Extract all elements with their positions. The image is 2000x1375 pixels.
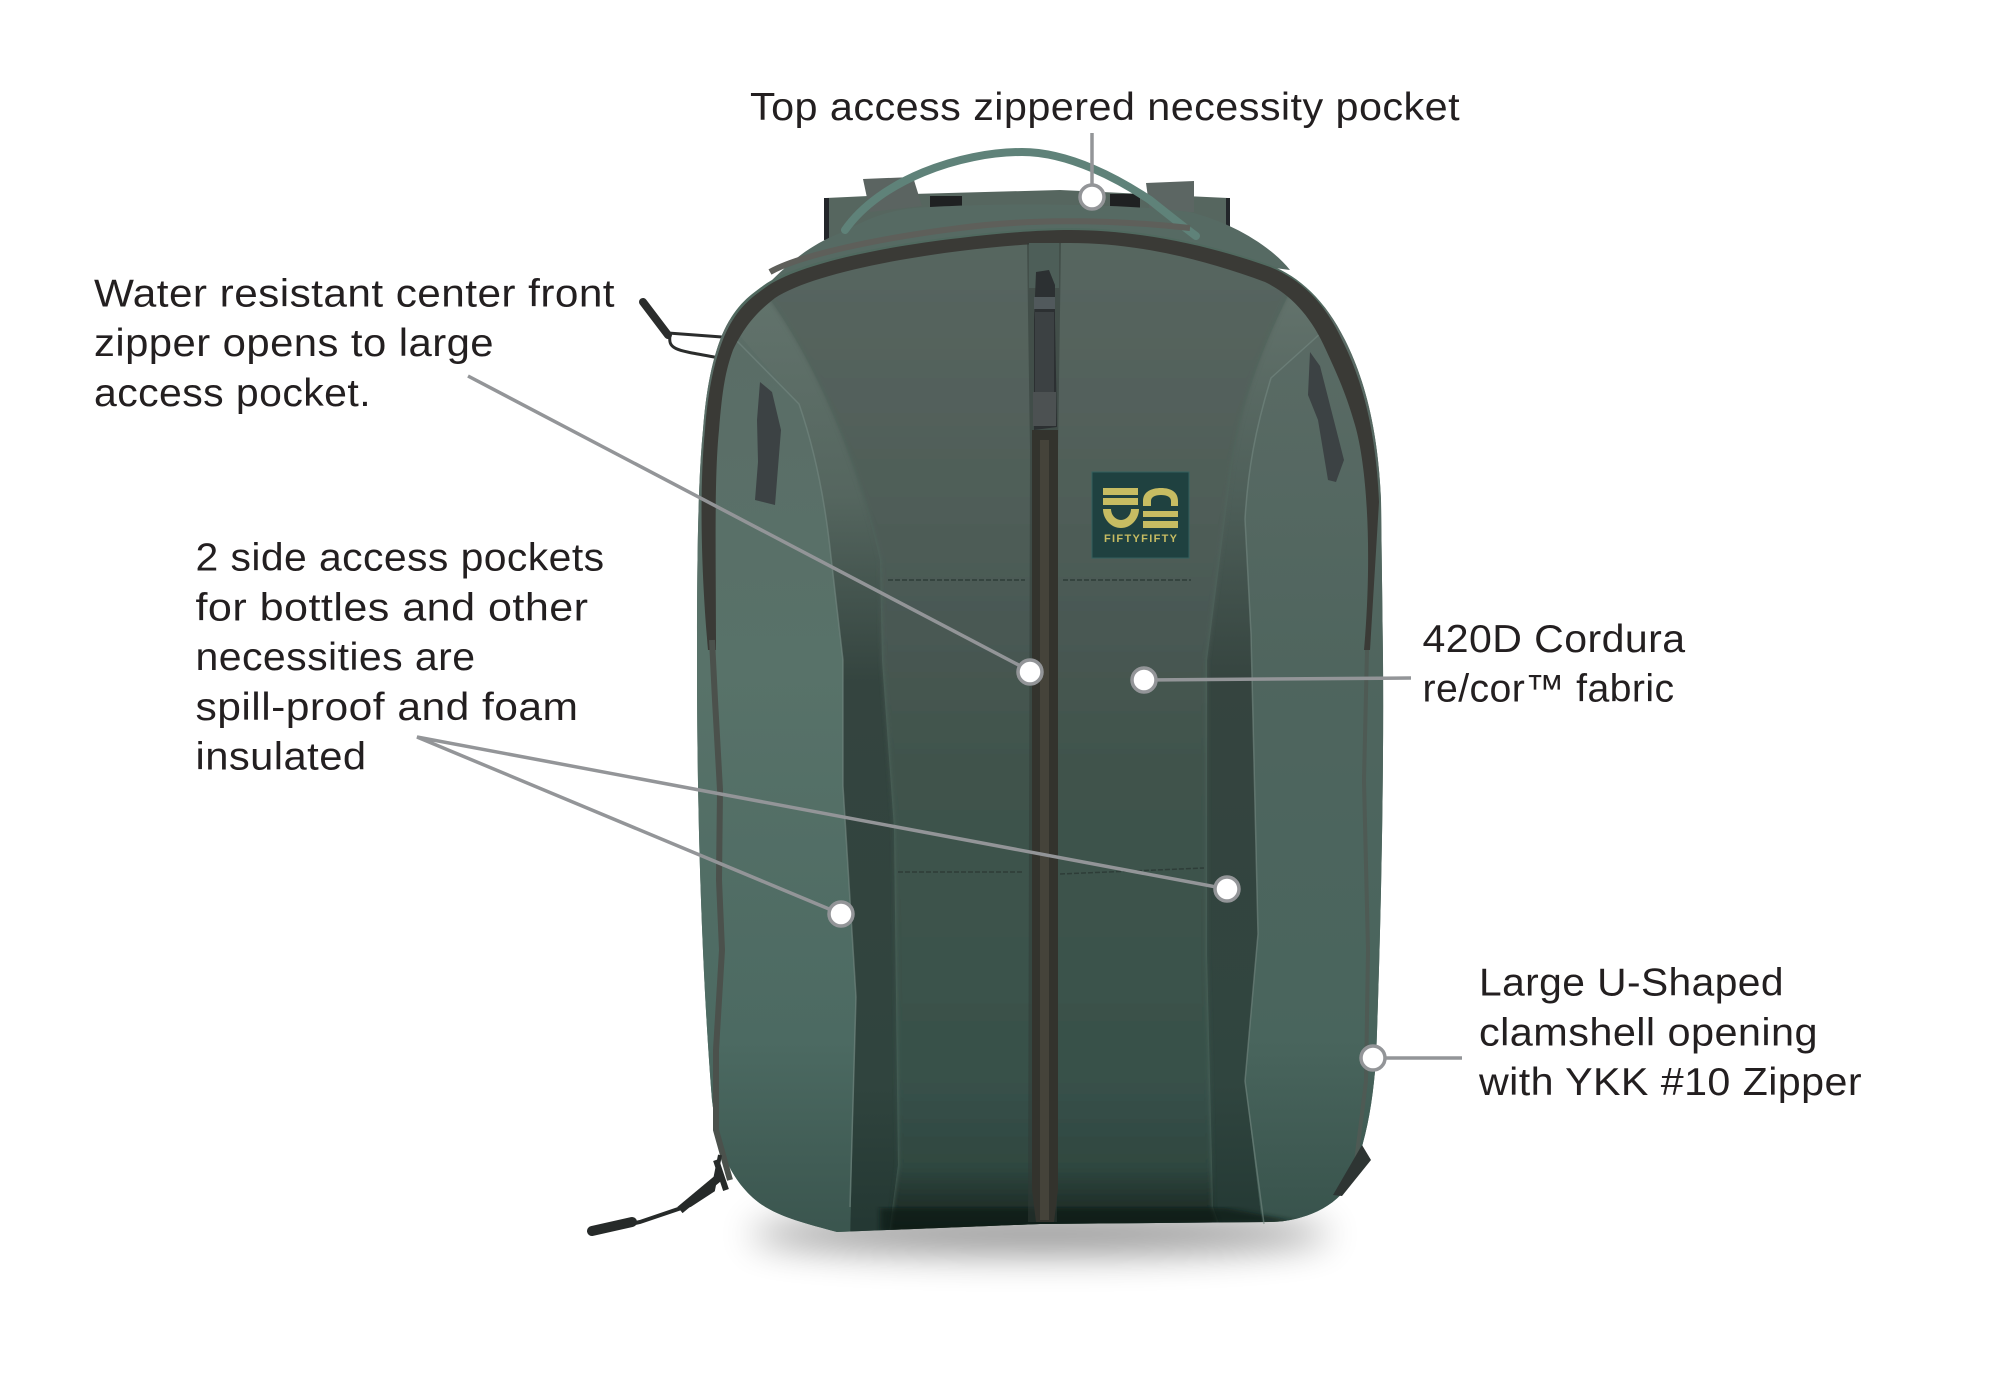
callout: side pockets: [196, 537, 1239, 926]
callout: clamshell opening: clamshell opening: [1479, 1012, 1818, 1054]
right fold band: [1207, 297, 1312, 1222]
center zipper: [1027, 243, 1061, 1222]
back panel and shoulder straps: [824, 177, 1230, 240]
center front panels: [771, 302, 1250, 1230]
callout: side pockets: for bottles and other: [196, 586, 588, 629]
logo patch: [1092, 472, 1189, 558]
right side stitched seam: [1355, 650, 1368, 1170]
fold highlight lines: [735, 324, 1331, 1224]
callout: side pockets: spill-proof and foam: [196, 686, 578, 729]
top seam zipper edge: [702, 230, 1379, 650]
callout: side pockets: 2 side access pockets: [196, 537, 604, 580]
left side zipper cord: [643, 302, 722, 358]
callout: clamshell opening: [1361, 962, 1862, 1104]
bottom right strap: [1333, 1145, 1371, 1196]
center zipper pull: [1034, 270, 1057, 430]
backpack photo: [592, 152, 1390, 1254]
callout: fabric: [1132, 618, 1686, 710]
ground shadow: [750, 1214, 1330, 1254]
callout: top pocket: [750, 86, 1460, 209]
callout: center front zipper: zipper opens to large: [94, 322, 494, 365]
horizontal stitch lines: [888, 580, 1204, 874]
bottom left strap and puller: [592, 1155, 726, 1232]
callout: fabric: re/cor™ fabric: [1422, 668, 1674, 710]
callout: center front zipper: [94, 272, 1042, 684]
bottom shading: [880, 1208, 1300, 1232]
top panel: [767, 204, 1290, 295]
logo wordmark: FIFTYFIFTY: [1104, 533, 1178, 545]
left side pocket pull: [755, 382, 781, 505]
callout: side pockets: insulated: [196, 736, 366, 779]
callout: center front zipper: Water resistant center front: [94, 272, 615, 316]
callout: center front zipper: access pocket.: [94, 372, 371, 415]
callout: clamshell opening: with YKK #10 Zipper: [1478, 1061, 1862, 1104]
left side panel: [690, 320, 856, 1240]
callout: fabric: 420D Cordura: [1422, 618, 1686, 661]
callout: clamshell opening: Large U-Shaped: [1479, 962, 1784, 1004]
backpack body: [690, 221, 1390, 1240]
top seam stitching: [770, 221, 1190, 272]
right side panel: [1245, 300, 1390, 1240]
right side pocket pull: [1308, 352, 1344, 482]
callout: top pocket: Top access zippered necessity pocket: [750, 86, 1460, 129]
left fold band: [735, 295, 898, 1240]
left side stitched seam: [712, 640, 730, 1180]
top carry handle: [845, 152, 1196, 236]
callout: side pockets: necessities are: [196, 636, 476, 679]
logo mark: [1103, 488, 1178, 528]
